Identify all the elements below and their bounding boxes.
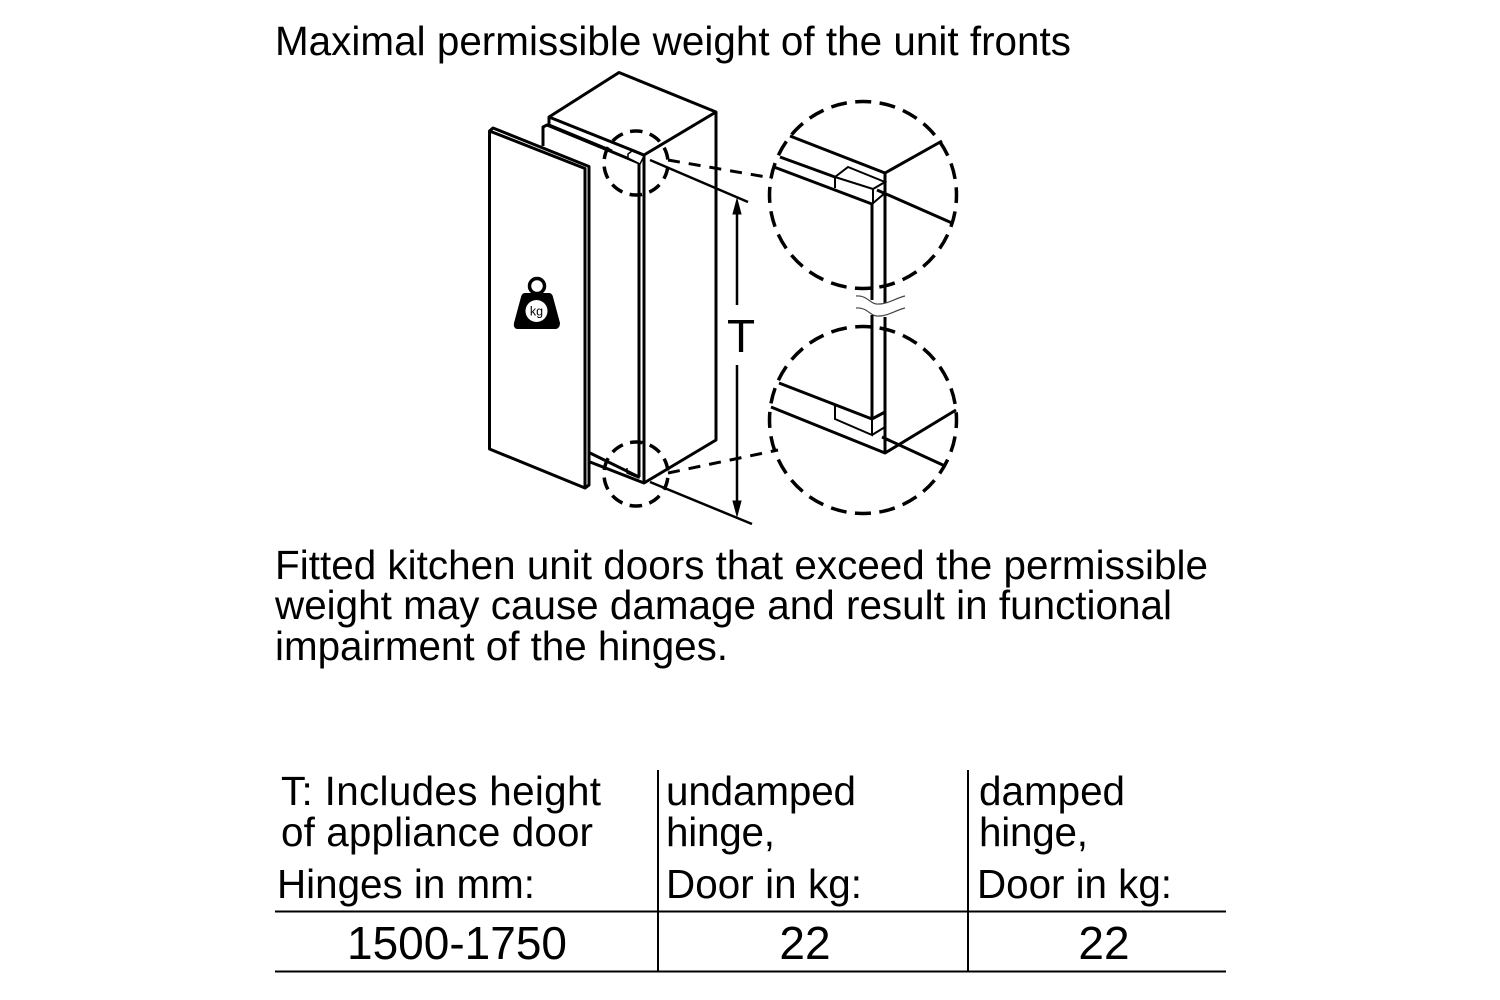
- column heading: damped: Door in kg:: [977, 861, 1172, 907]
- table row values: [347, 917, 1130, 969]
- column heading: height: [277, 768, 601, 907]
- column heading: damped: [977, 768, 1172, 907]
- column heading: height: of appliance door: [281, 809, 593, 855]
- column heading: undamped: [666, 768, 862, 907]
- table: [275, 768, 1226, 972]
- column heading: height: Hinges in mm:: [277, 861, 535, 907]
- dashed leader lines: [668, 160, 778, 473]
- height dimension T: [727, 199, 755, 516]
- weight icon: kg: [530, 304, 543, 318]
- column heading: undamped: undamped: [666, 768, 856, 814]
- column heading: damped: hinge,: [979, 809, 1088, 855]
- table row values: 1500-1750: [347, 917, 567, 969]
- weight icon: [514, 278, 560, 329]
- body text: weight may cause damage and result in functional: [274, 582, 1172, 628]
- column heading: height: T: Includes height: [281, 768, 601, 814]
- upper hinge, small: [628, 151, 644, 164]
- column heading: undamped: hinge,: [666, 809, 775, 855]
- height dimension T: T: [727, 310, 755, 362]
- body text: Fitted kitchen unit doors that exceed the permissible: [275, 542, 1208, 588]
- title: Maximal permissible weight of the unit fronts: [275, 18, 1071, 64]
- cabinet body: [543, 72, 716, 483]
- diagram: appliance cabinet and door: [490, 72, 778, 524]
- body text: impairment of the hinges.: [275, 623, 728, 669]
- column heading: undamped: Door in kg:: [666, 861, 862, 907]
- small dashed circle: upper hinge: [604, 131, 668, 195]
- break marks: [856, 296, 905, 316]
- table row values: 22: [1078, 917, 1130, 969]
- dimension extension lines: [650, 160, 752, 524]
- column heading: damped: damped: [979, 768, 1125, 814]
- detail: lower hinge: [770, 315, 956, 514]
- table row values: 22: [779, 917, 831, 969]
- body text: [274, 542, 1208, 669]
- small dashed circle: lower hinge: [604, 442, 668, 506]
- lower hinge, small: [627, 468, 639, 478]
- detail: upper hinge: [770, 102, 956, 303]
- door panel: [490, 128, 589, 488]
- table rules: [275, 770, 1226, 972]
